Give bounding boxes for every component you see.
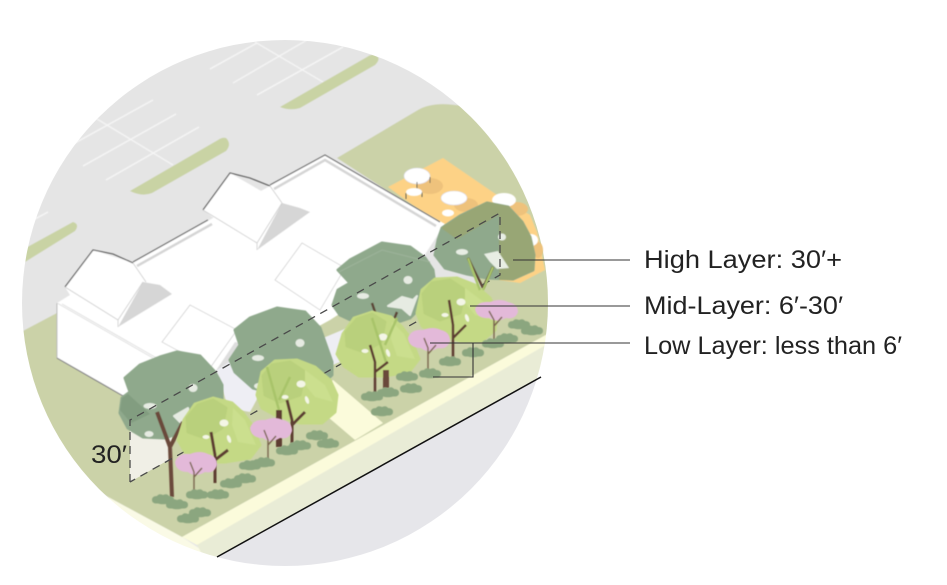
30 foot plane	[130, 398, 172, 482]
label: 30 foot height: 30′	[91, 441, 127, 469]
cross path between planters	[330, 380, 383, 440]
orange patio	[388, 158, 545, 283]
parking lot stripes	[35, 40, 343, 219]
dormer: back left	[65, 250, 172, 327]
sidewalk	[182, 327, 560, 545]
mid layer tree 1	[178, 398, 260, 483]
high layer tree 2	[230, 308, 332, 395]
building	[57, 155, 445, 412]
mid layer tree 2	[257, 360, 337, 447]
pale shade behind trees	[217, 328, 347, 412]
mid layer tree 3	[337, 312, 419, 393]
low layer pink trees	[175, 300, 518, 492]
patio tables	[404, 168, 543, 258]
leader lines	[430, 260, 630, 377]
road edge line	[217, 377, 541, 557]
label: high layer: High Layer: 30′+	[644, 246, 842, 274]
label: low layer: Low Layer: less than 6′	[644, 332, 902, 360]
dormer: back right	[203, 173, 310, 250]
parking islands	[22, 55, 378, 262]
pale ground fringe	[108, 497, 201, 552]
label: mid layer: Mid-Layer: 6′-30′	[644, 292, 843, 320]
upper right lawn	[337, 104, 547, 288]
shrubs	[152, 319, 543, 523]
dormer: front right	[275, 243, 345, 310]
high layer tree 1	[120, 352, 222, 497]
parapet edges	[133, 155, 440, 262]
road	[217, 366, 560, 585]
mid layer tree 4	[417, 258, 497, 357]
outer verge	[198, 346, 544, 556]
high layer tree 4	[435, 203, 534, 288]
high layer tree 3	[333, 243, 435, 323]
lower lawn	[24, 287, 536, 538]
dormer: front left	[162, 305, 248, 378]
circular site vignette	[22, 40, 548, 566]
dashed height lines	[130, 213, 500, 482]
